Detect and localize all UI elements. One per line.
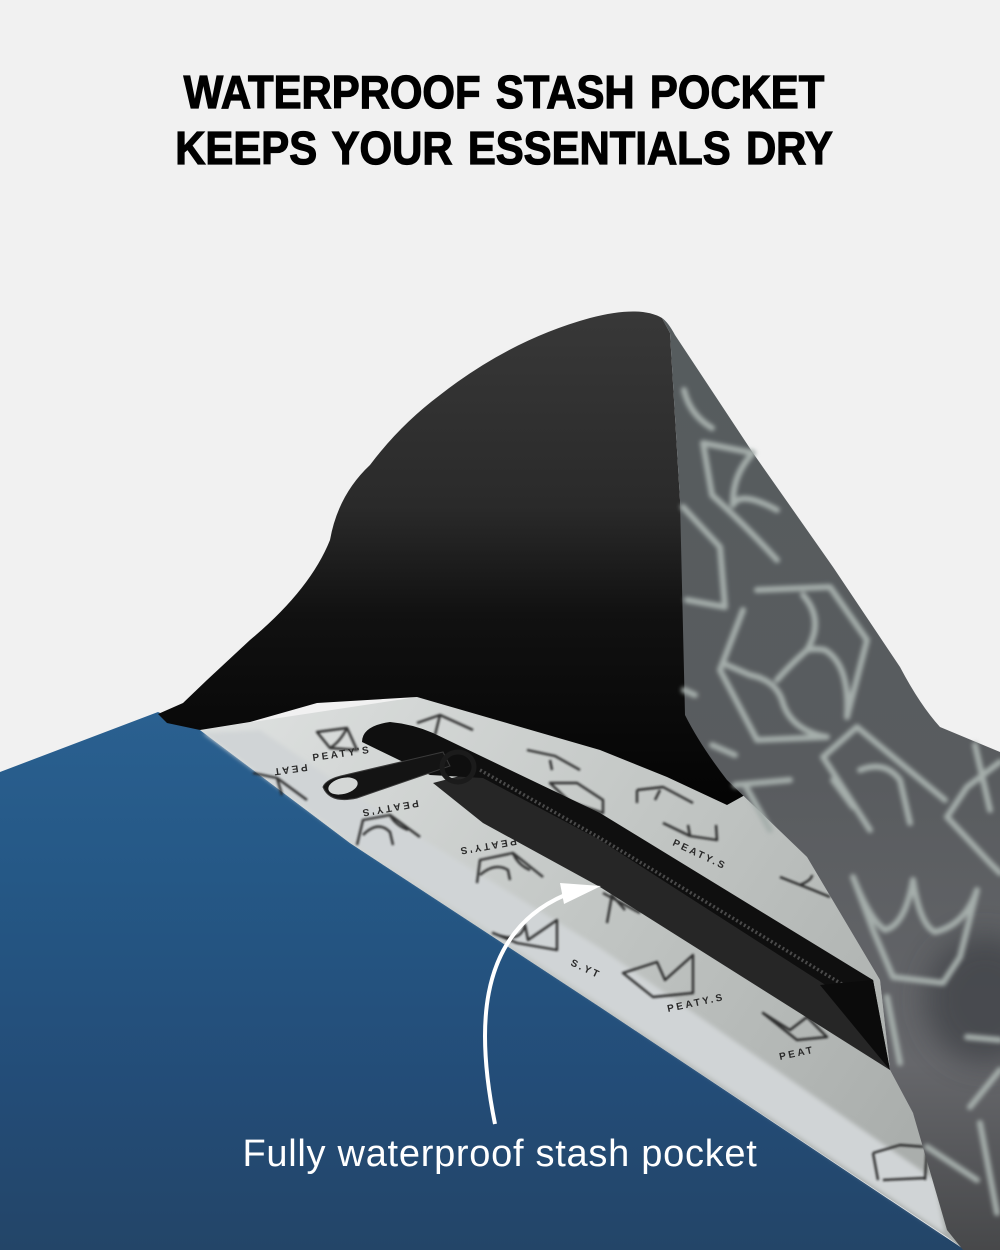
caption: Fully waterproof stash pocket xyxy=(242,1133,758,1175)
brand text on lining: PEAT xyxy=(271,761,308,777)
brand text on lining: PEATY.S xyxy=(666,992,726,1015)
crown pattern on flap xyxy=(683,390,1000,1213)
zipper upper band xyxy=(362,722,880,1020)
brand text on lining: PEATY'S xyxy=(312,745,372,764)
black fabric flap xyxy=(158,312,745,805)
zipper pull xyxy=(323,752,450,800)
white curved arrow xyxy=(485,883,601,1124)
brand text on lining: PEATY.S xyxy=(671,838,728,872)
brand text on lining: PEAT xyxy=(778,1045,816,1063)
brand text on lining xyxy=(271,745,816,1063)
title: WATERPROOF STASH POCKET xyxy=(184,66,824,118)
brand text on lining: PEATY'S xyxy=(457,835,517,856)
zipper xyxy=(323,722,890,1070)
crown marks xyxy=(253,715,927,1180)
brand text on lining: S.YT xyxy=(569,958,603,981)
grey patterned flap xyxy=(662,318,1000,1250)
brand text on lining: PEATY'S xyxy=(359,797,419,818)
blue fabric body xyxy=(0,712,965,1250)
title xyxy=(175,66,833,174)
title: KEEPS YOUR ESSENTIALS DRY xyxy=(175,122,833,174)
zipper fabric tape xyxy=(433,770,890,1070)
pocket lining with crown pattern xyxy=(200,697,965,1250)
